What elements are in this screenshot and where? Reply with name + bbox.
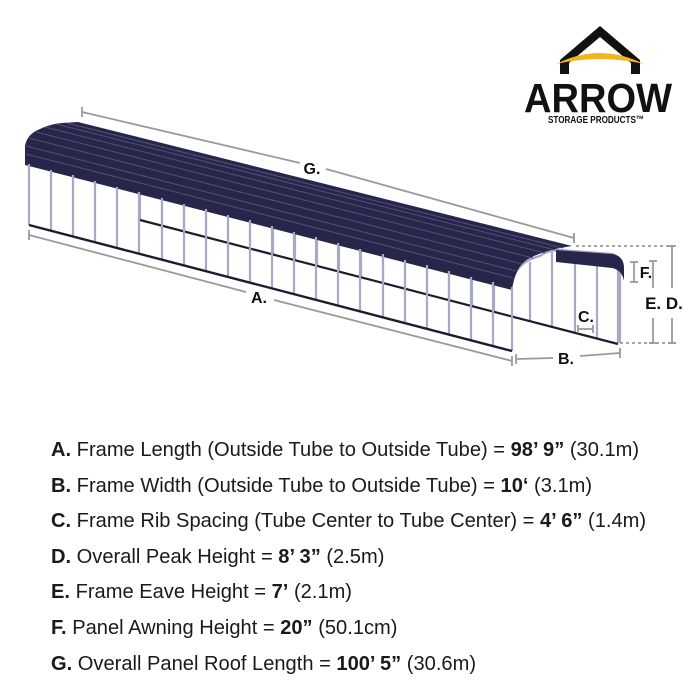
specifications list xyxy=(51,439,646,675)
far-end roof xyxy=(556,250,624,281)
dimension lines xyxy=(29,107,676,366)
back posts xyxy=(140,192,618,343)
label C: C. xyxy=(578,309,594,326)
label F: F. xyxy=(640,265,652,282)
front rail xyxy=(29,225,512,351)
label B: B. xyxy=(558,351,574,368)
label E D: E. D. xyxy=(645,294,683,313)
specifications list: G. Overall Panel Roof Length = 100’ 5” (30.6m) xyxy=(51,653,476,675)
roof xyxy=(25,122,572,290)
specifications list: C. Frame Rib Spacing (Tube Center to Tube Center) = 4’ 6” (1.4m) xyxy=(51,510,646,532)
specifications list: E. Frame Eave Height = 7’ (2.1m) xyxy=(51,581,352,603)
logo wordmark: ARROW xyxy=(524,75,672,121)
label A: A. xyxy=(251,290,267,307)
specifications list: A. Frame Length (Outside Tube to Outside Tube) = 98’ 9” (30.1m) xyxy=(51,439,639,461)
end arch xyxy=(512,250,620,343)
logo xyxy=(524,26,672,126)
icon: house roof xyxy=(556,26,644,74)
front posts xyxy=(29,164,512,351)
carport diagram xyxy=(25,107,683,368)
specifications list: F. Panel Awning Height = 20” (50.1cm) xyxy=(51,617,397,639)
back rail xyxy=(140,220,618,344)
specifications list: B. Frame Width (Outside Tube to Outside Tube) = 10‘ (3.1m) xyxy=(51,475,592,497)
logo subtitle: STORAGE PRODUCTS™ xyxy=(548,114,644,126)
label G: G. xyxy=(304,161,320,178)
specifications list: D. Overall Peak Height = 8’ 3” (2.5m) xyxy=(51,546,384,568)
